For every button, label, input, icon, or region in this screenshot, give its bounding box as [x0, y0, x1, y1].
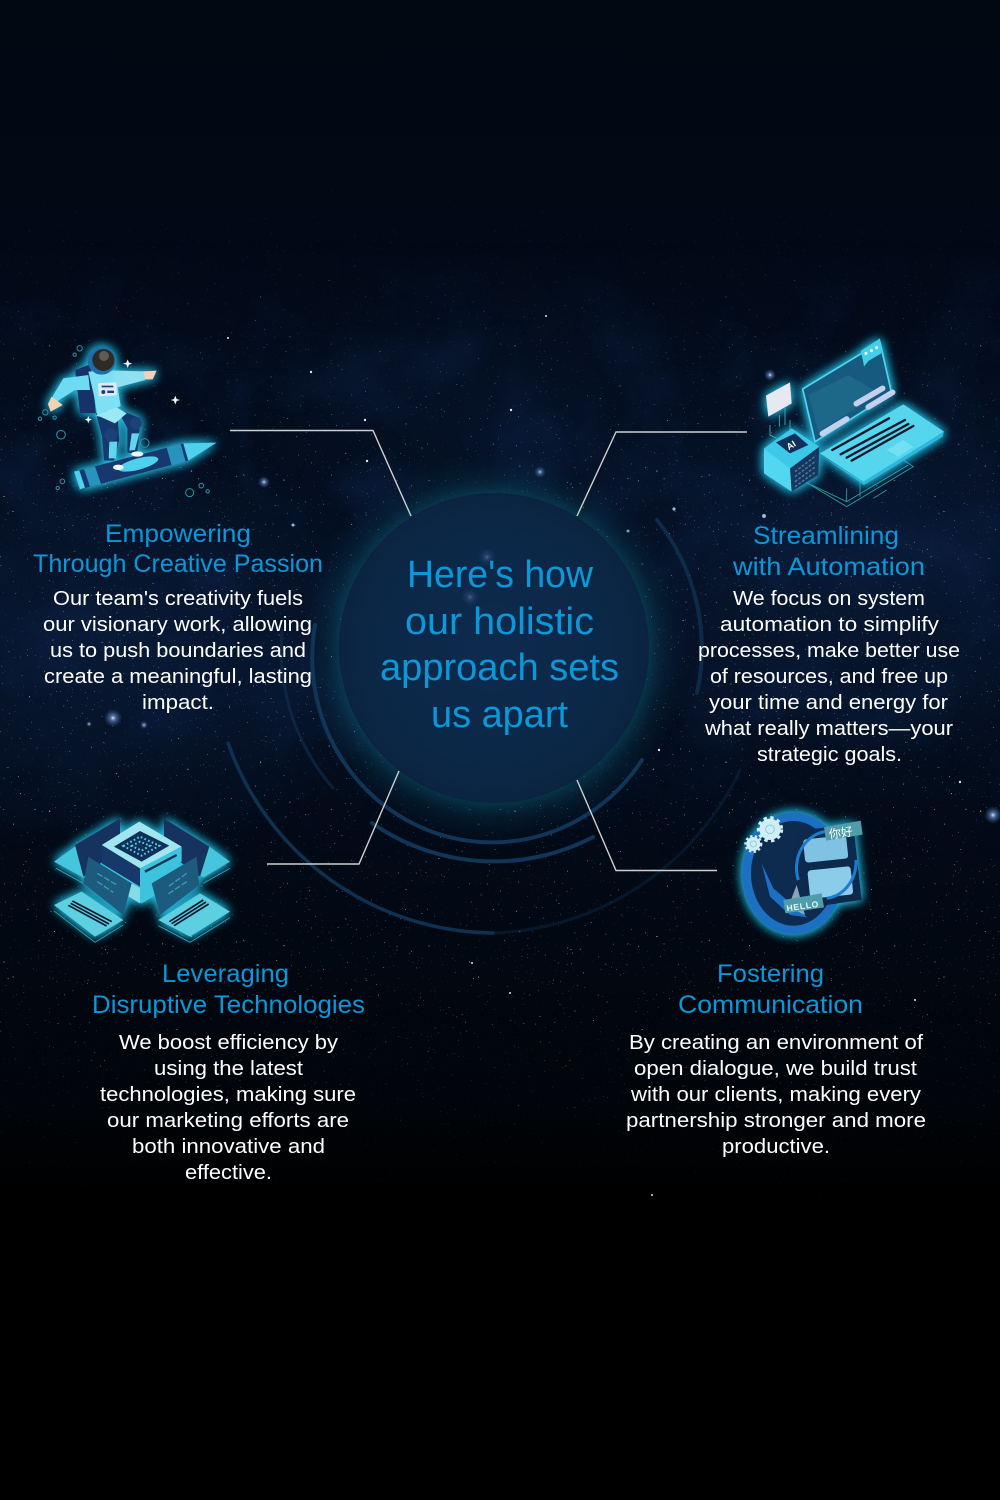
icon: server and laptops [54, 818, 230, 942]
orbit arcs [228, 520, 740, 933]
heading and text: Fostering: By creating an environment of [629, 1031, 923, 1054]
heading and text: Empowering: us to push boundaries and [50, 639, 306, 662]
heading and text: Fostering: productive. [722, 1135, 830, 1158]
heading and text: Empowering: Empowering [105, 520, 251, 548]
heading and text: Leveraging: technologies, making sure [100, 1083, 356, 1106]
heading and text: Leveraging: both innovative and [132, 1135, 325, 1158]
heading and text: Streamlining: processes, make better use [698, 639, 960, 662]
heading and text: Streamlining [698, 522, 960, 766]
center title: approach sets [380, 647, 619, 689]
heading and text: Streamlining: We focus on system [733, 587, 925, 610]
center title: us apart [431, 694, 568, 736]
heading and text: Leveraging: using the latest [154, 1057, 303, 1080]
heading and text: Fostering: partnership stronger and more [626, 1109, 926, 1132]
icon: astronaut surfing on crayon [38, 346, 217, 497]
heading and text: Leveraging: Leveraging [162, 960, 289, 988]
center title: our holistic [405, 601, 594, 643]
heading and text: Fostering: Fostering [717, 960, 824, 988]
heading and text: Streamlining: of resources, and free up [710, 665, 948, 688]
heading and text: Leveraging: Disruptive Technologies [92, 991, 365, 1019]
center title: Here's how [407, 554, 594, 596]
icon: laptop and AI cube [764, 338, 944, 507]
heading and text: Streamlining: Streamlining [753, 522, 899, 550]
heading and text: Fostering: with our clients, making every [630, 1083, 922, 1106]
heading and text: Empowering [33, 520, 323, 714]
heading and text: Empowering: Through Creative Passion [33, 550, 323, 578]
heading and text: Streamlining: strategic goals. [757, 743, 902, 766]
heading and text: Empowering: create a meaningful, lasting [44, 665, 312, 688]
connector: top right [577, 432, 747, 516]
heading and text: Empowering: our visionary work, allowing [43, 613, 312, 636]
heading and text: Fostering: open dialogue, we build trust [634, 1057, 917, 1080]
heading and text: Empowering: impact. [142, 691, 214, 714]
label: hello: HELLO [786, 899, 820, 913]
label: AI: AI [785, 439, 798, 452]
heading and text: Streamlining: your time and energy for [709, 691, 948, 714]
label: nihao: 你好 [828, 824, 854, 842]
icon: translation device and chat tags [746, 817, 863, 930]
heading and text: Leveraging: effective. [185, 1161, 272, 1184]
connector: bottom left [267, 771, 399, 864]
heading and text: Leveraging: We boost efficiency by [119, 1031, 339, 1054]
connector: bottom right [577, 780, 717, 870]
heading and text: Streamlining: with Automation [732, 553, 925, 581]
heading and text: Fostering: Communication [678, 991, 863, 1019]
heading and text: Leveraging: our marketing efforts are [107, 1109, 349, 1132]
connector: top left [230, 430, 411, 516]
heading and text: Streamlining: automation to simplify [720, 613, 940, 636]
heading and text: Streamlining: what really matters—your [704, 717, 953, 740]
heading and text: Empowering: Our team's creativity fuels [53, 587, 303, 610]
central glowing disc [298, 452, 690, 844]
heading and text: Leveraging [92, 960, 365, 1184]
heading and text: Fostering [626, 960, 926, 1158]
center title [380, 554, 619, 736]
